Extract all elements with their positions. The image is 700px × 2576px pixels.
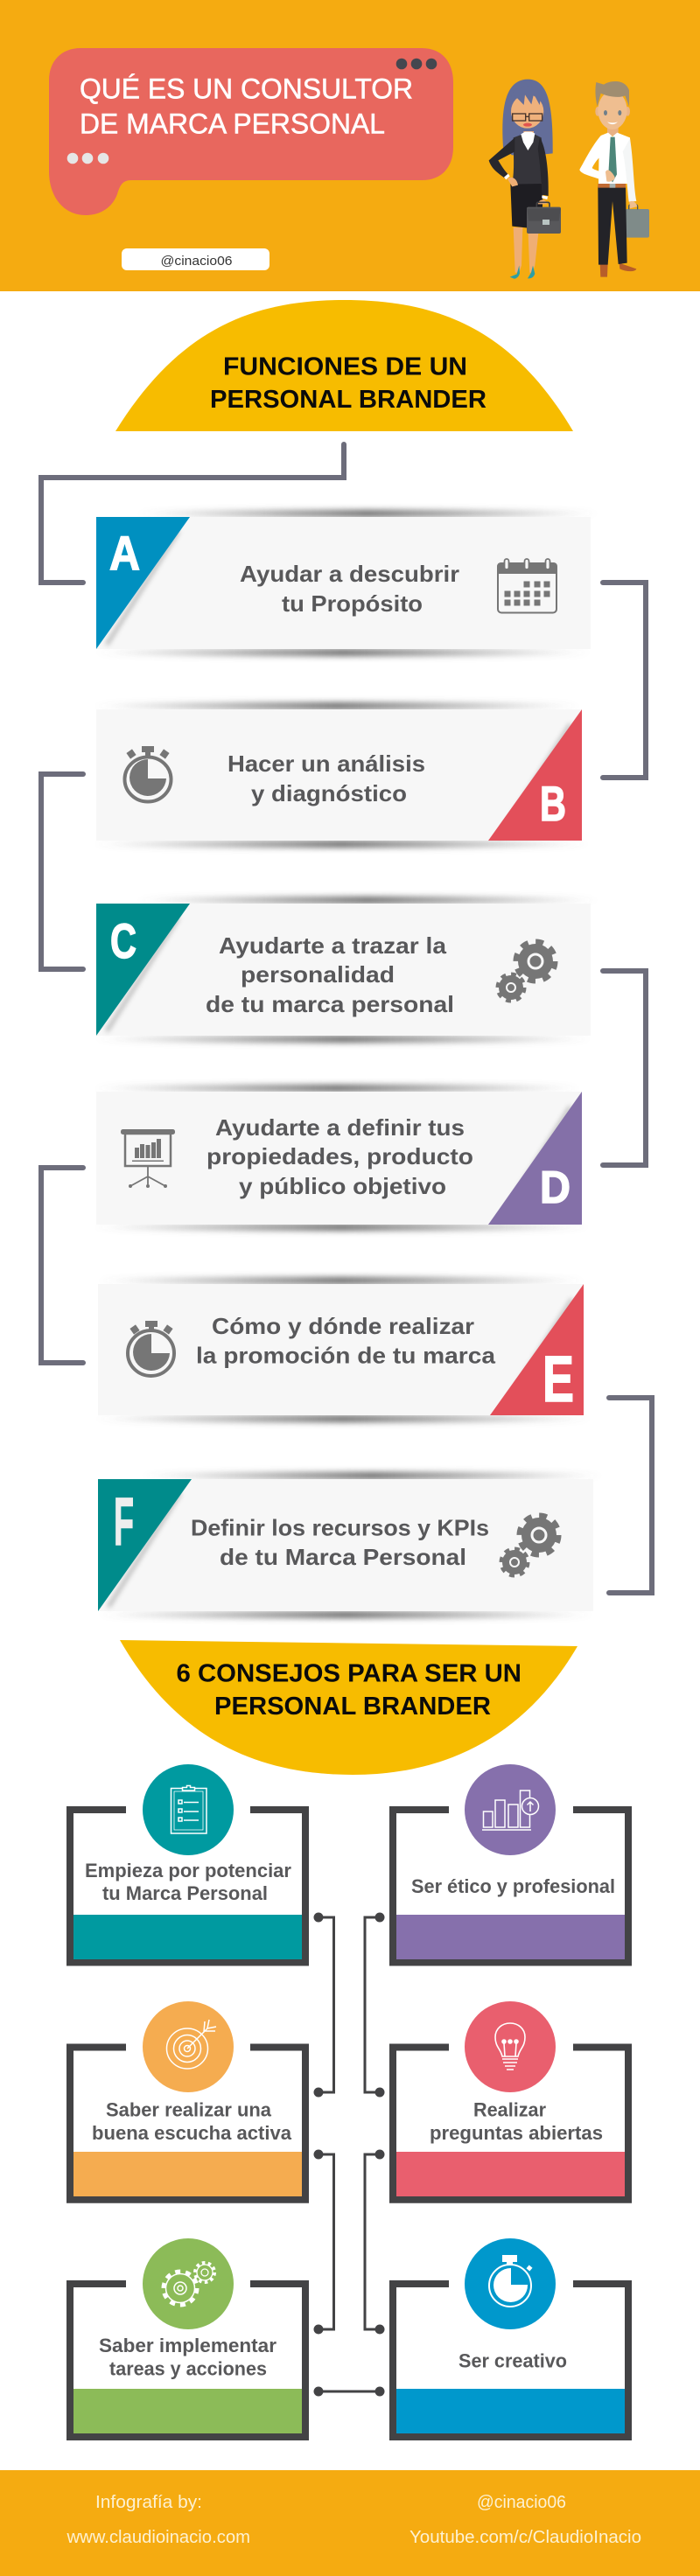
- card F: F: [114, 1484, 134, 1560]
- connector: B to C: [41, 774, 83, 969]
- footer: www.claudioinacio.com: [66, 2528, 250, 2547]
- icon: gears: [497, 941, 555, 1001]
- icon: gears: [500, 1515, 558, 1576]
- heading arch: consejos: 6 CONSEJOS PARA SER UN: [177, 1660, 522, 1688]
- tip 6: Ser creativo: [458, 2349, 567, 2372]
- connector: tips bottom: [313, 2386, 385, 2397]
- connector: C to D: [603, 971, 646, 1165]
- heading arch: consejos: PERSONAL BRANDER: [214, 1693, 491, 1721]
- icon: clipboard: [172, 1786, 206, 1833]
- connector: heading to A: [41, 444, 344, 583]
- icon: presentation board: [121, 1129, 175, 1188]
- tip 5: Saber implementar: [99, 2335, 276, 2356]
- card E: E: [542, 1343, 574, 1415]
- tip 5: tareas y acciones: [109, 2358, 267, 2379]
- handle pill: [122, 248, 270, 270]
- tip 3: buena escucha activa: [92, 2122, 292, 2144]
- heading arch: consejos: [120, 1640, 578, 1775]
- card C: Ayudarte a trazar la: [219, 932, 447, 959]
- card F: de tu Marca Personal: [220, 1544, 466, 1570]
- tip 1: [70, 1764, 305, 1963]
- tip 1: tu Marca Personal: [102, 1882, 268, 1904]
- card E: la promoción de tu marca: [196, 1342, 496, 1368]
- card E: [94, 1277, 592, 1422]
- icon: calendar: [497, 559, 557, 612]
- tip 3: Saber realizar una: [106, 2099, 272, 2120]
- card B: Hacer un análisis: [228, 750, 425, 777]
- card B: B: [540, 776, 566, 831]
- illustration: man: [579, 81, 649, 277]
- icon: target: [166, 2020, 216, 2069]
- card A: tu Propósito: [282, 590, 423, 617]
- handle pill: @cinacio06: [161, 254, 233, 269]
- heading arch: funciones: FUNCIONES DE UN: [223, 353, 467, 381]
- tip 3: [70, 2001, 305, 2200]
- tip 4: Realizar: [473, 2099, 546, 2120]
- connector: A to B: [603, 583, 646, 778]
- connector: tips left 2: [313, 2150, 334, 2334]
- tip 6: [393, 2238, 628, 2437]
- footer: @cinacio06: [477, 2493, 566, 2512]
- card A: Ayudar a descubrir: [240, 561, 459, 587]
- tip 4: [393, 2001, 628, 2200]
- icon: stopwatch: [124, 746, 172, 801]
- illustration: woman: [489, 80, 561, 279]
- card C: personalidad: [241, 961, 395, 988]
- card C: [94, 897, 599, 1043]
- card B: [92, 702, 591, 848]
- tip 2: Ser ético y profesional: [411, 1875, 615, 1897]
- card D: D: [540, 1162, 570, 1213]
- tip 1: Empieza por potenciar: [85, 1860, 291, 1881]
- tip 5: [70, 2238, 305, 2437]
- card D: [92, 1085, 591, 1231]
- icon: light bulb: [495, 2023, 525, 2070]
- connector: E to F: [609, 1398, 652, 1593]
- connector: tips right 2: [365, 2150, 385, 2334]
- icon: stopwatch: [489, 2255, 533, 2307]
- heading arch: funciones: PERSONAL BRANDER: [210, 386, 486, 414]
- icon: stopwatch: [128, 1321, 174, 1376]
- card C: C: [110, 913, 136, 968]
- tip 4: preguntas abiertas: [430, 2122, 603, 2144]
- card B: y diagnóstico: [251, 780, 407, 806]
- icon: growth bars: [482, 1791, 539, 1830]
- speech bubble: [49, 48, 453, 215]
- heading arch: funciones: [116, 300, 573, 431]
- card D: Ayudarte a definir tus: [215, 1114, 465, 1141]
- card D: y público objetivo: [239, 1173, 446, 1199]
- connector: D to E: [41, 1168, 83, 1363]
- title: DE MARCA PERSONAL: [80, 108, 385, 140]
- card F: Definir los recursos y KPIs: [191, 1515, 489, 1541]
- card C: de tu marca personal: [206, 991, 454, 1017]
- connector: tips right 1: [365, 1912, 385, 2098]
- connector: tips left 1: [313, 1912, 334, 2098]
- card D: propiedades, producto: [206, 1143, 473, 1169]
- icon: gears: [164, 2263, 214, 2305]
- footer: Youtube.com/c/ClaudioInacio: [410, 2528, 641, 2547]
- title: QUÉ ES UN CONSULTOR: [80, 73, 413, 105]
- card A: A: [109, 526, 140, 580]
- title: [80, 73, 413, 140]
- tip 2: [393, 1764, 628, 1963]
- card E: Cómo y dónde realizar: [212, 1313, 474, 1339]
- card A: [94, 510, 599, 656]
- card F: [96, 1472, 604, 1618]
- footer: Infografía by:: [95, 2493, 202, 2512]
- header band: [0, 0, 700, 291]
- footer: [0, 2470, 700, 2576]
